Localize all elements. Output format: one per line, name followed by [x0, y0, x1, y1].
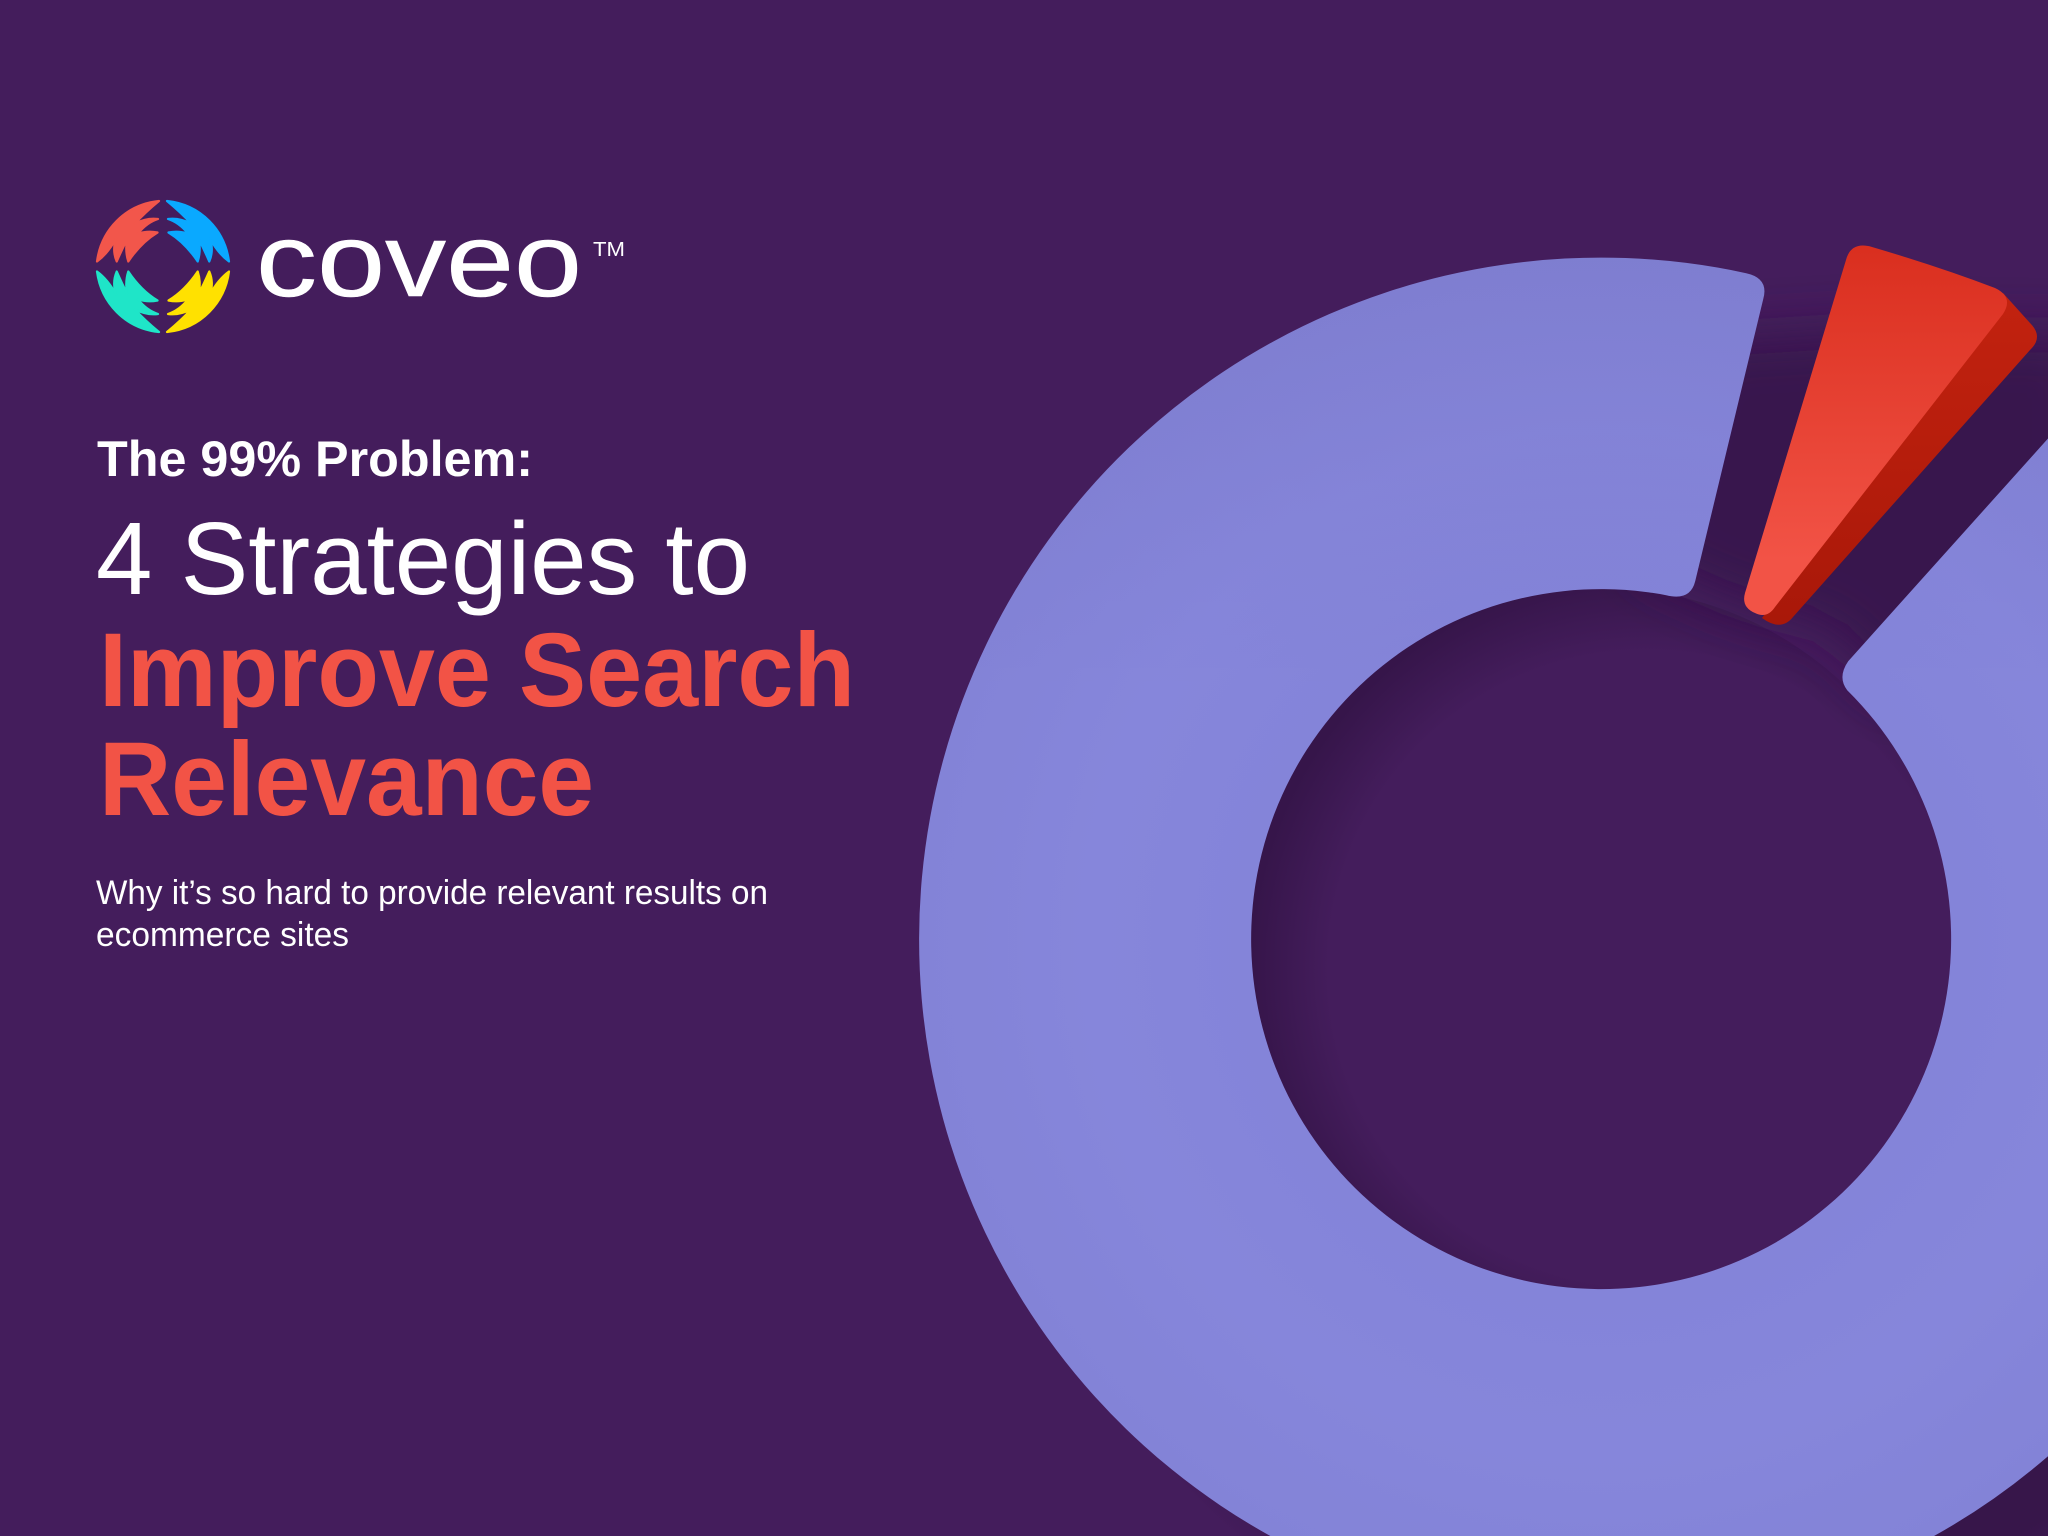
eyebrow heading: The 99% Problem:	[97, 431, 533, 487]
title line 1: 4 Strategies to	[96, 501, 750, 616]
donut chart red slice	[1744, 246, 2037, 625]
logo	[97, 201, 625, 332]
ring hole inner shadow	[1250, 588, 1954, 1292]
title line 2: Improve Search	[99, 612, 855, 729]
trademark: TM	[593, 239, 625, 261]
donut chart ring	[919, 258, 2048, 1536]
subtitle: Why it’s so hard to provide relevant results on	[96, 874, 768, 912]
logo wordmark: coveo	[256, 203, 582, 319]
ring outer shadow	[1100, 1100, 2048, 1536]
title line 3: Relevance	[99, 721, 594, 838]
subtitle	[96, 874, 768, 954]
shadow in slice gaps	[1640, 330, 2048, 700]
logo mark	[97, 201, 229, 332]
slice face	[1744, 246, 2007, 615]
slice side	[1762, 293, 2037, 625]
subtitle: ecommerce sites	[96, 916, 349, 954]
ring hole	[1250, 588, 1954, 1292]
